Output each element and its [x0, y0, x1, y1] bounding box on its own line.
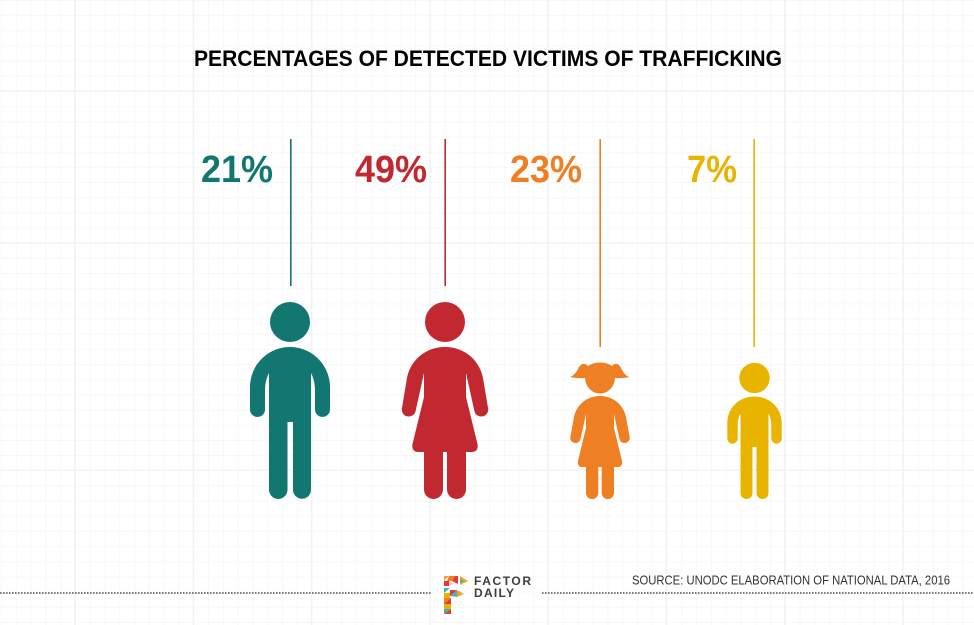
title: PERCENTAGES OF DETECTED VICTIMS OF TRAFFICKING [194, 46, 782, 71]
logo: Factor Daily [444, 574, 531, 614]
boys: percentage, leader line and icon [687, 139, 782, 499]
women: percentage, leader line and icon [355, 139, 488, 499]
logo mark: mosaic F [444, 576, 468, 614]
men: percentage, leader line and icon: 21% [201, 149, 273, 191]
boys: percentage, leader line and icon: 7% [687, 149, 737, 191]
logo wordmark: FACTOR [474, 574, 531, 588]
logo: Factor Daily: DAILY [474, 586, 514, 600]
women: percentage, leader line and icon: 49% [355, 149, 427, 191]
girls: percentage, leader line and icon: 23% [510, 149, 582, 191]
men: percentage, leader line and icon [201, 139, 330, 499]
girls: percentage, leader line and icon [510, 139, 630, 499]
footer dotted line left [0, 592, 432, 594]
footer dotted line right [542, 592, 974, 594]
